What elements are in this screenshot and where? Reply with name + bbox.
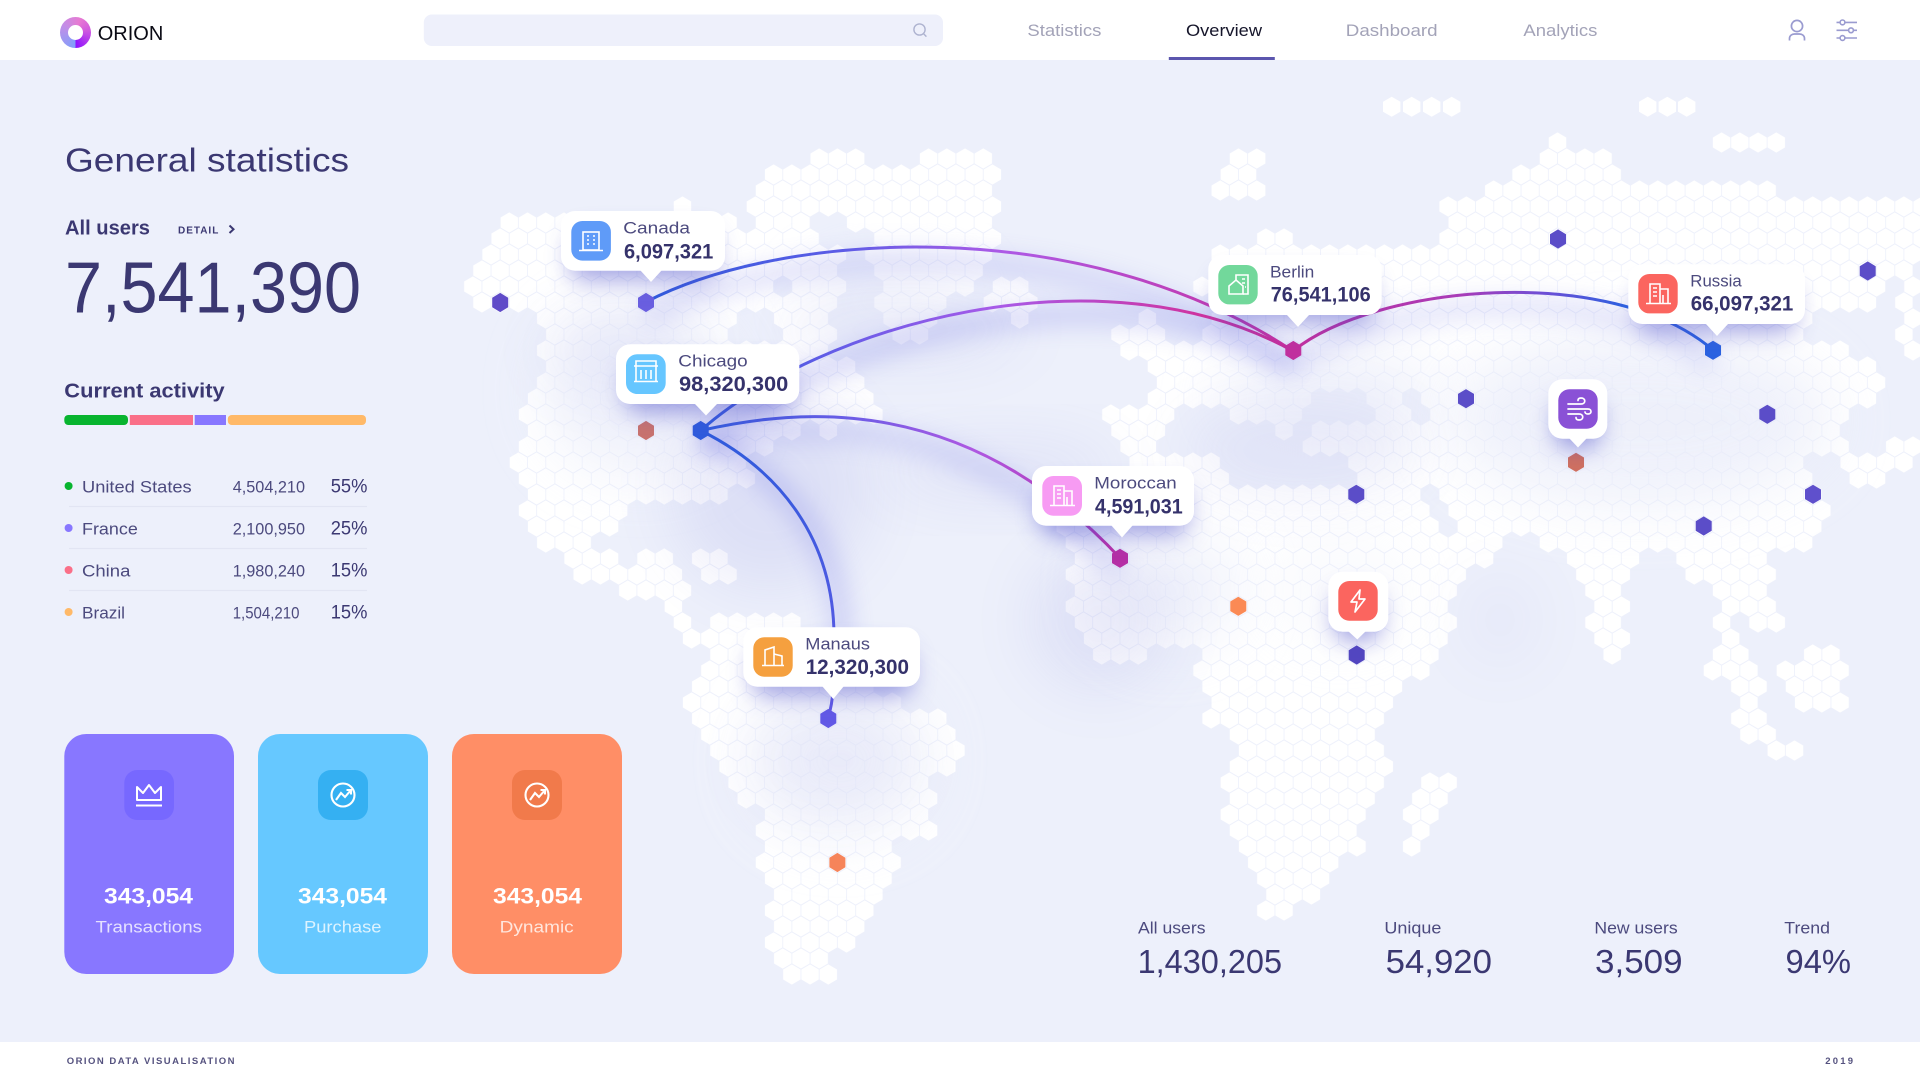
header bar bbox=[0, 0, 1920, 60]
icon: user bbox=[1790, 20, 1804, 40]
tooltip: Berlin: Berlin bbox=[1270, 262, 1314, 281]
activity list bbox=[65, 476, 367, 623]
tooltip: Berlin bbox=[1208, 255, 1382, 327]
map markers bbox=[492, 229, 1876, 872]
row: United States bbox=[65, 476, 367, 497]
row: United States: United States bbox=[82, 478, 192, 496]
footer: ORION DATA VISUALISATION bbox=[67, 1056, 235, 1067]
row: Brazil: 15% bbox=[331, 602, 367, 623]
fading of land interiors bbox=[545, 265, 1830, 835]
card: Transactions bbox=[64, 734, 234, 974]
tooltip: Moroccan: Moroccan bbox=[1094, 473, 1177, 492]
tooltip: Canada: Canada bbox=[623, 218, 691, 237]
stat: All users: All users bbox=[1138, 919, 1206, 938]
tooltip: Canada bbox=[561, 211, 725, 282]
search box bbox=[424, 14, 943, 46]
footer: 2019 bbox=[1825, 1056, 1853, 1067]
icon: settings sliders bbox=[1836, 20, 1857, 40]
all users block: DETAIL bbox=[178, 225, 218, 236]
row: France: France bbox=[82, 520, 138, 538]
card: Dynamic: 343,054 bbox=[493, 884, 583, 909]
all users block bbox=[65, 217, 361, 329]
arc: Chicago to Berlin bbox=[701, 301, 1293, 430]
row: China: 1,980,240 bbox=[233, 562, 305, 580]
stat: New users: 3,509 bbox=[1595, 943, 1683, 980]
stat: Trend bbox=[1784, 919, 1851, 980]
stat: All users: 1,430,205 bbox=[1138, 943, 1282, 980]
card: Transactions: 343,054 bbox=[104, 884, 194, 909]
tooltip: wind icon bbox=[1548, 379, 1607, 448]
row: France bbox=[65, 518, 367, 539]
tooltip: Moroccan: 4,591,031 bbox=[1095, 495, 1183, 518]
card: Dynamic: Dynamic bbox=[500, 918, 574, 936]
row: China: 15% bbox=[331, 560, 367, 581]
hexagonal world map bbox=[464, 97, 1920, 986]
card: Transactions: Transactions bbox=[96, 918, 202, 936]
activity stacked bar bbox=[64, 415, 366, 425]
stat: New users bbox=[1594, 919, 1683, 980]
row: China bbox=[65, 560, 367, 581]
tooltip: Chicago: 98,320,300 bbox=[679, 373, 788, 396]
connection arcs bbox=[646, 247, 1713, 718]
stat: New users: New users bbox=[1594, 919, 1678, 938]
tooltip: Manaus bbox=[743, 627, 920, 699]
card: Purchase: 343,054 bbox=[298, 884, 388, 909]
stat: All users bbox=[1138, 919, 1282, 980]
card: Purchase: Purchase bbox=[304, 918, 382, 936]
arc: Chicago to Moroccan bbox=[701, 417, 1120, 558]
stat: Unique: Unique bbox=[1384, 919, 1441, 938]
summary stats bbox=[1138, 919, 1851, 980]
navigation bbox=[1027, 22, 1597, 60]
soft shading over the map bbox=[540, 295, 1540, 820]
current activity heading: Current activity bbox=[64, 381, 226, 403]
card: Purchase bbox=[258, 734, 428, 974]
logo ring bbox=[60, 16, 91, 48]
all users block: All users bbox=[65, 217, 150, 239]
icon: crown bbox=[136, 785, 162, 806]
all users block: 7,541,390 bbox=[65, 249, 361, 329]
row: Brazil bbox=[65, 602, 367, 623]
arc: Berlin to Russia bbox=[1293, 292, 1713, 351]
navigation: Dashboard bbox=[1346, 22, 1438, 40]
row: China: China bbox=[82, 562, 131, 580]
arc glows bbox=[646, 261, 1713, 648]
stat: Trend: Trend bbox=[1784, 919, 1830, 938]
row: Brazil: 1,504,210 bbox=[233, 604, 300, 622]
tooltip: Berlin: 76,541,106 bbox=[1271, 284, 1371, 307]
tooltip: Russia: 66,097,321 bbox=[1691, 293, 1794, 316]
stat: Unique bbox=[1384, 919, 1492, 980]
tooltip: Chicago: Chicago bbox=[678, 352, 748, 371]
icon: trend circle bbox=[332, 784, 354, 806]
row: France: 25% bbox=[331, 518, 367, 539]
tooltip: Canada: 6,097,321 bbox=[624, 240, 714, 263]
row: United States: 4,504,210 bbox=[233, 478, 305, 496]
row: Brazil: Brazil bbox=[82, 604, 125, 622]
heading: General statistics: General statistics bbox=[65, 142, 349, 179]
stat: Unique: 54,920 bbox=[1386, 943, 1492, 980]
map hexes on odd rows bbox=[464, 147, 1920, 970]
tooltip: Moroccan bbox=[1032, 466, 1194, 538]
stat: Trend: 94% bbox=[1786, 943, 1851, 980]
tooltip: Manaus: 12,320,300 bbox=[806, 656, 909, 679]
tooltip: Manaus: Manaus bbox=[805, 634, 870, 653]
brand name: ORION bbox=[98, 23, 163, 45]
footer bbox=[0, 1042, 1920, 1080]
navigation: Statistics bbox=[1027, 22, 1101, 40]
tooltip: lightning icon bbox=[1328, 572, 1388, 640]
tooltip: Russia: Russia bbox=[1690, 272, 1742, 291]
arc: Chicago to Manaus bbox=[701, 430, 834, 718]
arc: Canada to Berlin bbox=[646, 247, 1293, 351]
navigation: Overview bbox=[1186, 22, 1262, 40]
row: France: 2,100,950 bbox=[233, 520, 305, 538]
row: United States: 55% bbox=[331, 476, 367, 497]
tooltip: Russia bbox=[1628, 264, 1805, 336]
icon: trend circle bbox=[526, 784, 548, 806]
navigation: Analytics bbox=[1523, 22, 1597, 40]
map hexes on even rows bbox=[473, 131, 1920, 986]
tooltip: Chicago bbox=[616, 344, 799, 416]
arctic island hexes bbox=[1383, 97, 1695, 117]
card: Dynamic bbox=[452, 734, 622, 974]
